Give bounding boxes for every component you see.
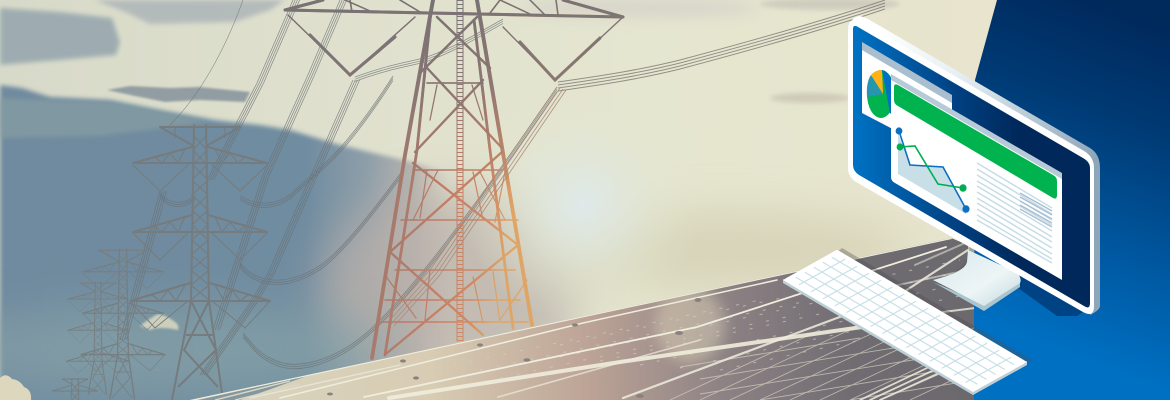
farthest pylon: [52, 378, 98, 400]
fine grid at lower right: [670, 325, 980, 400]
panel clamps: [327, 298, 702, 398]
base of blue bank: [0, 390, 400, 400]
keyboard key grid: [792, 255, 1018, 387]
text lines: [977, 163, 1052, 263]
front window: [891, 74, 1062, 280]
pink haze: [320, 190, 580, 390]
far pylon: [66, 282, 130, 394]
monitor screen: [853, 26, 1090, 307]
blue-grey slats at lower left: [198, 376, 307, 400]
blue panel: [974, 0, 1170, 400]
middle pylon: [81, 249, 165, 399]
stand shadow on solar panel: [933, 240, 975, 306]
distant power lines: [120, 0, 557, 375]
thin dark cloud: [107, 86, 250, 102]
near pylon: [130, 125, 270, 400]
green-grey cloud band: [0, 98, 210, 138]
cell dashes: [420, 260, 960, 378]
keyboard: [783, 248, 1032, 395]
main pylon: [285, 0, 623, 358]
main power lines: [558, 0, 885, 91]
monitor bezel: [848, 20, 1094, 314]
monitor shadow: [1000, 260, 1100, 316]
highlighted text lines: [1020, 193, 1052, 227]
monitor: [848, 16, 1100, 315]
lines crossing the main pylon: [385, 87, 566, 326]
pale lower sky tint: [0, 305, 400, 395]
back window: [862, 42, 952, 160]
pie chart: [867, 70, 895, 118]
monitor stand: [933, 250, 1021, 311]
line chart: [896, 127, 970, 214]
keyboard rim: [787, 252, 1023, 389]
panel streaks: [190, 238, 975, 400]
blue storm bank: [0, 85, 450, 400]
green header bar: [894, 84, 1057, 199]
top cloud strip: [95, 0, 285, 24]
monitor side edge: [852, 16, 1100, 315]
solar panels: [180, 230, 980, 400]
upper left cloud: [0, 8, 120, 65]
